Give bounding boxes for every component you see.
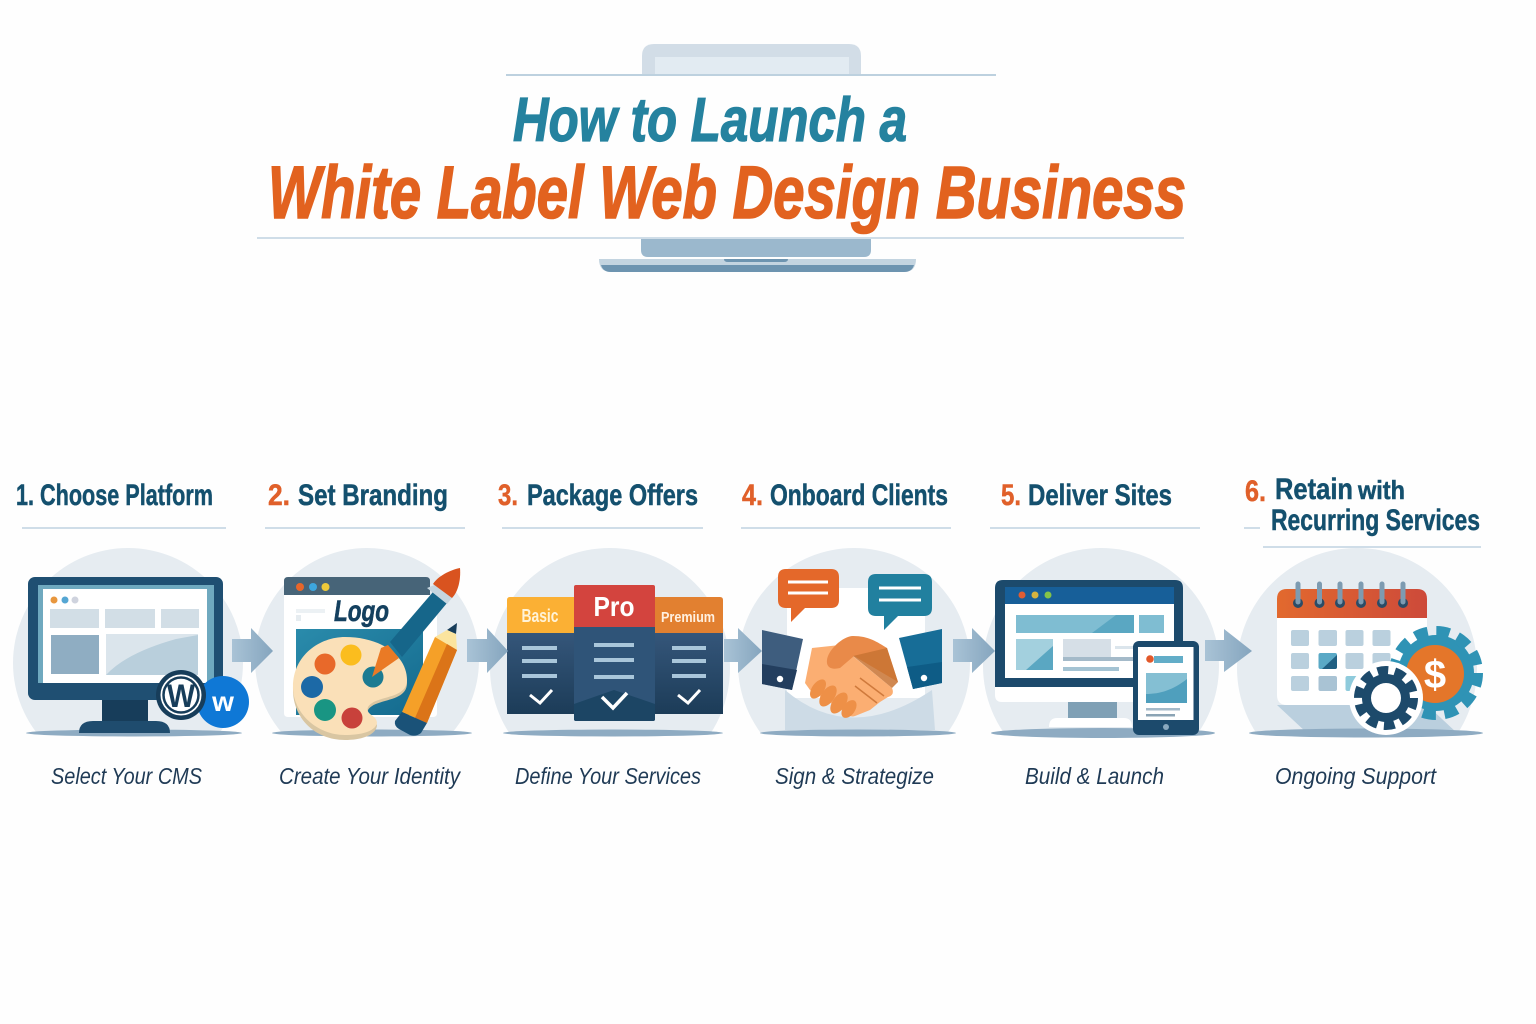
heading: step 6: with: [1357, 475, 1405, 505]
caption: step 2: Create Your Identity: [279, 763, 461, 789]
caption: step 6: Ongoing Support: [1275, 763, 1437, 789]
icon: monitor with CMS logos: [13, 548, 249, 736]
heading: step 3: 3.: [498, 479, 518, 512]
heading: step 6: Retain: [1275, 473, 1353, 506]
heading: step 1: 1. Choose Platform: [16, 479, 213, 512]
right cuff: [899, 629, 942, 689]
speech bubble: teal: [868, 574, 932, 630]
caption: step 3: Define Your Services: [515, 763, 701, 789]
calendar rings: [1293, 598, 1408, 608]
card: pro: [574, 585, 655, 721]
icon: monitor with CMS logos: W: [167, 678, 196, 714]
arrow 3 to 4: [724, 628, 762, 673]
heading: step 5: 5.: [1001, 479, 1021, 512]
laptop base: [599, 238, 916, 272]
laptop screen top: [642, 44, 861, 75]
heading: step 4: 4.: [742, 479, 763, 512]
panel: step 4 onboard clients: [738, 479, 970, 789]
caption: step 1: Select Your CMS: [51, 763, 203, 789]
heading: step 2: Set Branding: [298, 479, 448, 512]
heading: step 4: [742, 479, 948, 512]
card: premium: [654, 597, 723, 714]
arrow 2 to 3: [467, 628, 508, 673]
left cuff: [762, 630, 803, 690]
caption: step 4: Sign & Strategize: [775, 763, 934, 789]
heading: step 6: 6.: [1245, 475, 1266, 508]
icon: pricing cards: [490, 548, 730, 736]
card: basic: Basic: [522, 606, 558, 626]
title line two: White Label Web Design Business: [268, 151, 1186, 234]
icon: monitor with CMS logos: w: [211, 686, 234, 717]
card: premium: Premium: [661, 609, 715, 626]
card: basic: [507, 597, 575, 714]
heading: step 3: [498, 479, 698, 512]
panel: step 2 set branding: [255, 479, 479, 789]
brush tip: [372, 645, 399, 677]
icon: calendar and gears: [1237, 548, 1483, 738]
title block with laptop: [257, 44, 1186, 272]
caption: step 5: Build & Launch: [1025, 763, 1164, 789]
heading: step 3: Package Offers: [527, 479, 698, 512]
icon: logo window, palette, brush and pencil: [256, 548, 479, 740]
panel: step 6 retain with recurring services: [1237, 473, 1483, 789]
speech bubble: orange: [778, 569, 839, 622]
panel: step 3 package offers: [490, 479, 730, 789]
tablet: [1133, 641, 1199, 735]
gear: blue with dollar: [1395, 632, 1477, 714]
gear: blue with dollar: $: [1424, 653, 1446, 697]
icon: handshake with speech bubbles: [738, 548, 970, 736]
pencil: [395, 623, 457, 736]
heading: step 5: [1001, 479, 1172, 512]
card: pro: Pro: [594, 591, 634, 622]
title line one: How to Launch a: [513, 86, 907, 155]
arrow 1 to 2: [232, 628, 273, 673]
icon: monitor and tablet: [983, 548, 1219, 738]
heading: step 5: Deliver Sites: [1028, 479, 1172, 512]
heading: step 4: Onboard Clients: [770, 479, 948, 512]
panel: step 1 choose platform: [13, 479, 249, 789]
palette: [293, 640, 407, 740]
heading: step 6: [1245, 473, 1480, 537]
icon: logo window, palette, brush and pencil: Logo: [334, 595, 389, 628]
arrow 4 to 5: [953, 628, 995, 673]
calendar cells: [1291, 630, 1390, 691]
heading: step 2: [268, 479, 448, 512]
paint brush handle: [390, 592, 447, 657]
heading: step 2: 2.: [268, 479, 290, 512]
arrow 5 to 6: [1205, 629, 1252, 672]
panel: step 5 deliver sites: [983, 479, 1219, 789]
gear: navy: [1349, 661, 1423, 735]
hands: [805, 636, 898, 721]
